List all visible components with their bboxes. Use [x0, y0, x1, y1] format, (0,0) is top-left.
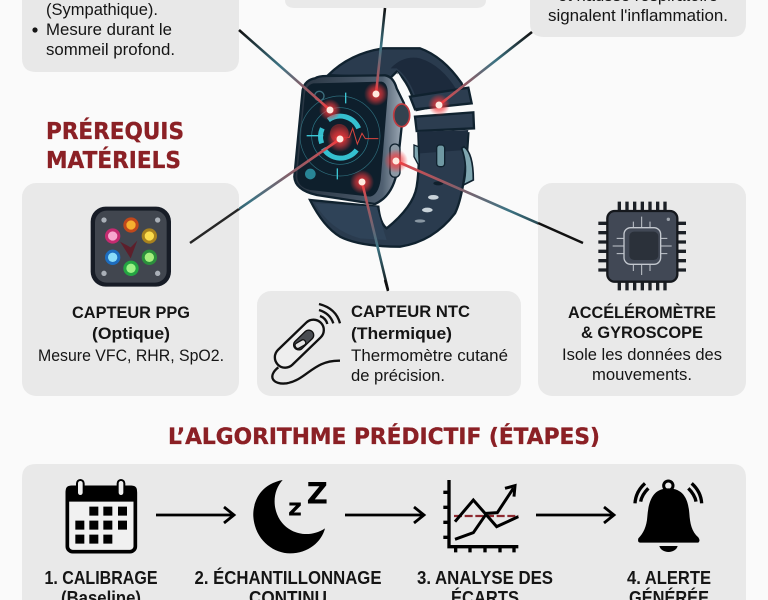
watch upper strap	[328, 48, 467, 110]
text block: accelerometer: mouvements.	[592, 365, 692, 384]
text block: accelerometer: & GYROSCOPE	[581, 323, 703, 342]
text block: PPG sensor: CAPTEUR PPG	[72, 303, 190, 322]
icon: moon: Z	[307, 477, 328, 511]
heading: hardware prerequisites	[46, 117, 184, 174]
panel: accelerometer and gyroscope	[538, 183, 746, 396]
text block: PPG sensor: Mesure VFC, RHR, SpO2.	[38, 346, 224, 365]
icon: moon: z	[288, 494, 302, 522]
arrow: calibration to sampling	[156, 507, 234, 523]
icon: microchip	[598, 202, 686, 290]
icon: deviation chart	[443, 480, 518, 552]
arrow: analysis to alert	[536, 507, 614, 523]
heading: hardware prerequisites: MATÉRIELS	[46, 146, 181, 174]
panel: top middle card	[285, 0, 486, 8]
watch dial rings	[300, 93, 380, 179]
arrow: sampling to analysis	[345, 507, 424, 523]
panel: NTC sensor	[257, 280, 521, 396]
text block: inflammation signal: signalent l'inflammation.	[548, 6, 728, 25]
glowing sensor points	[319, 82, 450, 194]
watch case	[294, 75, 404, 204]
watch screen	[297, 82, 388, 197]
text block: sympathetic measure	[32, 0, 175, 59]
illustration: smartwatch	[294, 48, 474, 247]
text block: PPG sensor: (Optique)	[92, 324, 170, 343]
panel: top left sympathetic card	[22, 0, 239, 72]
watch crown and button	[394, 104, 410, 127]
icon: NTC sensor	[271, 304, 340, 384]
panel: algorithm steps	[22, 464, 746, 600]
text block: NTC sensor	[351, 302, 508, 385]
text block: NTC sensor: de précision.	[351, 366, 445, 385]
icon: moon	[253, 477, 328, 553]
text block: sympathetic measure: (Sympathique).	[46, 0, 158, 19]
watch lower strap	[310, 133, 468, 247]
text block: NTC sensor: Thermomètre cutané	[351, 346, 508, 365]
text block: PPG sensor	[38, 303, 224, 365]
text block: accelerometer	[562, 303, 722, 384]
text block: sympathetic measure: Mesure durant le	[46, 20, 172, 39]
panel: PPG sensor	[22, 183, 239, 396]
text block: step labels: 1. CALIBRAGE	[44, 568, 158, 588]
heading: hardware prerequisites: PRÉREQUIS	[46, 117, 184, 145]
text block: accelerometer: ACCÉLÉROMÈTRE	[568, 303, 716, 322]
text block: step labels: 3. ANALYSE DES	[417, 568, 553, 588]
text block: sympathetic measure: sommeil profond.	[46, 40, 175, 59]
text block: step labels: 4. ALERTE	[627, 568, 711, 588]
watch strap loops and buckle	[410, 88, 472, 109]
heading: predictive algorithm: L’ALGORITHME PRÉDICTIF (ÉTAPES)	[168, 424, 600, 450]
text block: NTC sensor: CAPTEUR NTC	[351, 302, 470, 321]
icon: PPG sensor	[91, 207, 171, 287]
icon: alert bell	[635, 481, 702, 552]
text block: step labels: 2. ÉCHANTILLONNAGE	[194, 567, 382, 588]
text block: accelerometer: Isole les données des	[562, 345, 722, 364]
icon: calendar	[66, 480, 137, 552]
text block: step labels	[44, 567, 711, 600]
panel: top right inflammation card	[530, 0, 746, 37]
callout lines: sensors to cards	[190, 8, 583, 290]
text block: NTC sensor: (Thermique)	[351, 324, 452, 343]
